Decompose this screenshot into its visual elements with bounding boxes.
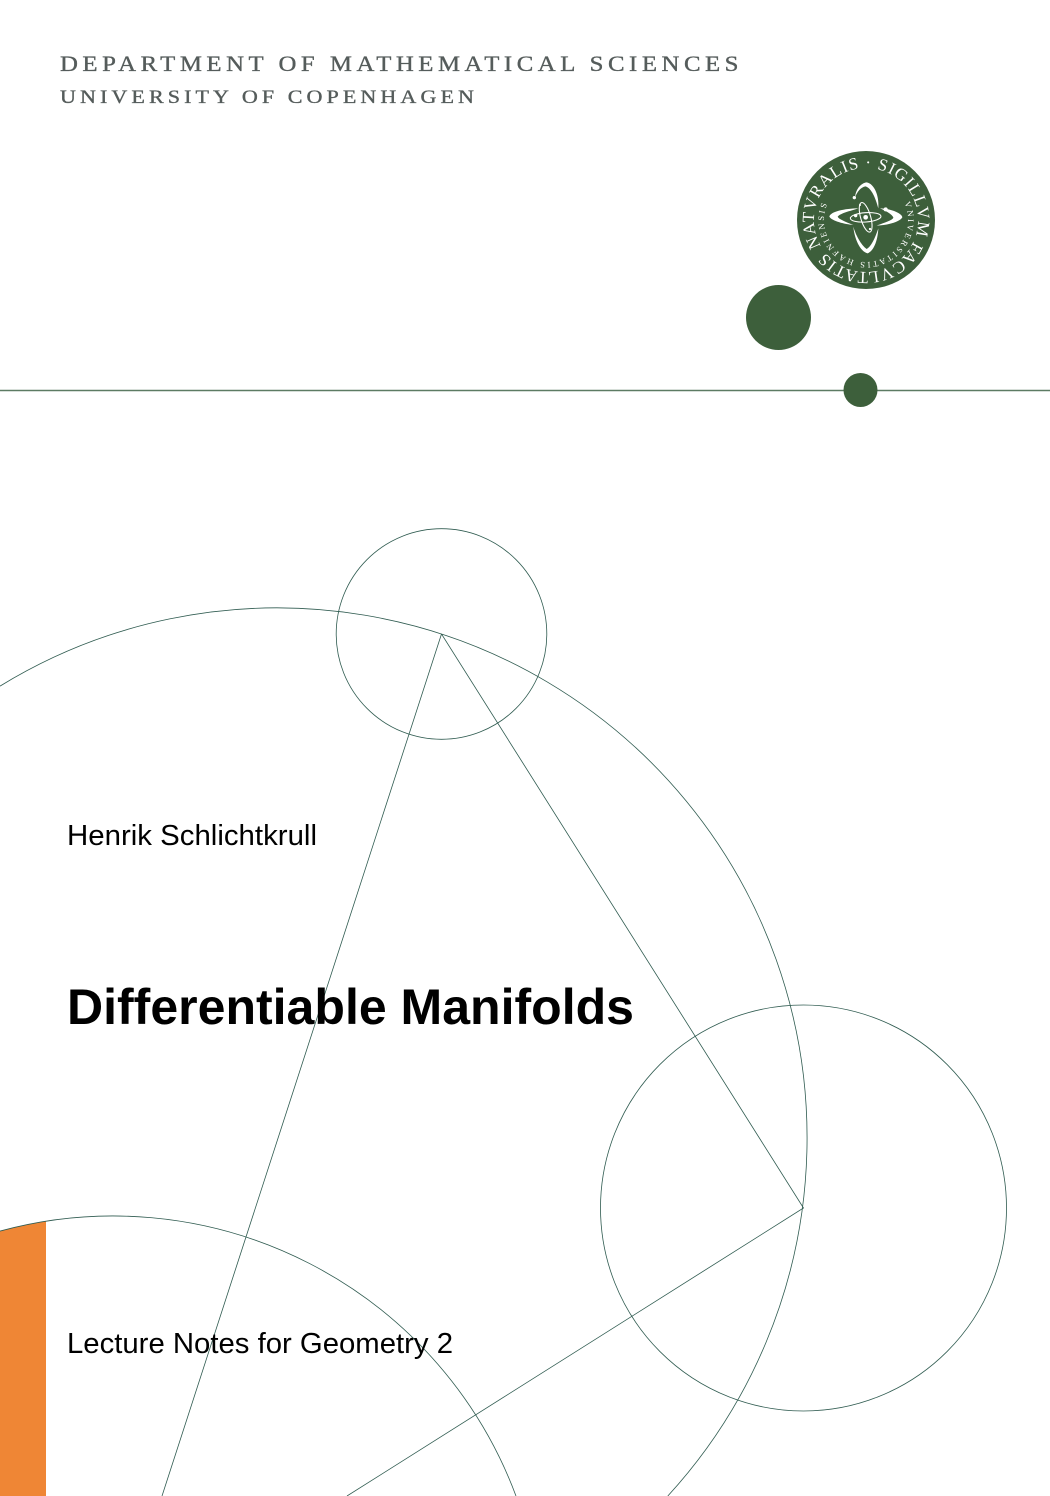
geometric construction: circles and lines [0, 529, 1006, 1496]
decorative dot: large [746, 285, 811, 350]
seal emblem: inner atom rings [850, 201, 881, 233]
icon: university seal [797, 151, 935, 289]
department line: DEPARTMENT OF MATHEMATICAL SCIENCES [60, 51, 743, 76]
author name: Henrik Schlichtkrull [67, 820, 317, 852]
seal inner inscription: VNIVERSITATIS HAFNIENSIS [818, 201, 914, 268]
horizontal rule [0, 390, 1050, 392]
university line: UNIVERSITY OF COPENHAGEN [60, 87, 478, 108]
seal emblem: orbits [829, 182, 902, 253]
subtitle: Lecture Notes for Geometry 2 [67, 1328, 453, 1360]
seal outer inscription: NATVRALIS · SIGILLVM FACVLTATIS [802, 158, 930, 284]
decorative dot: small on rule [844, 373, 878, 407]
header: department name [60, 51, 743, 108]
title: Differentiable Manifolds [67, 979, 634, 1035]
orange side block [0, 1221, 46, 1496]
